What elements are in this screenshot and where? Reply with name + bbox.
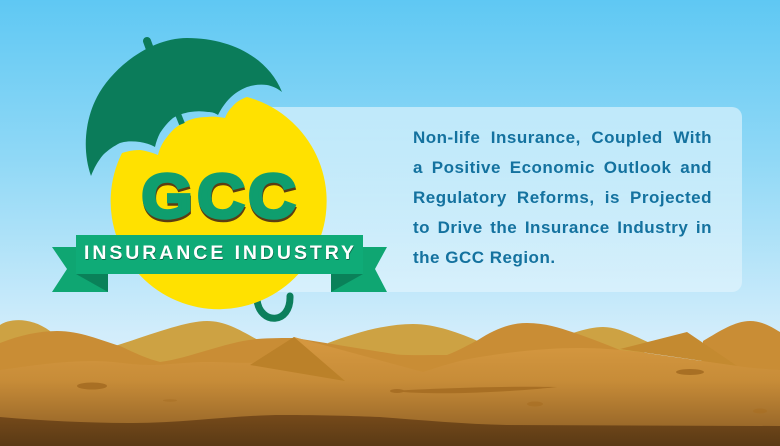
right ribbon tail bbox=[331, 247, 387, 292]
left ribbon fold bbox=[76, 274, 108, 292]
panel paragraph: the GCC Region. bbox=[413, 248, 556, 267]
ribbon subtitle: INSURANCE INDUSTRY bbox=[84, 242, 354, 264]
panel paragraph: Regulatory Reforms, is Projected bbox=[413, 188, 712, 207]
GCC letter shadow bbox=[142, 164, 296, 234]
panel paragraph: to Drive the Insurance Industry in bbox=[413, 218, 712, 237]
umbrella canopy bbox=[86, 38, 282, 176]
GCC heading bbox=[141, 161, 296, 234]
GCC letter faces: C bbox=[248, 161, 296, 231]
text panel bbox=[230, 107, 742, 292]
umbrella handle hook bbox=[257, 296, 290, 318]
right ribbon fold bbox=[331, 274, 363, 292]
GCC letter shadow: G bbox=[142, 164, 193, 234]
GCC letter faces bbox=[141, 161, 296, 231]
foreground dark sand bbox=[0, 415, 780, 446]
GCC letter shadow: C bbox=[198, 164, 245, 234]
back dunes bbox=[0, 320, 650, 365]
left pyramid bbox=[250, 337, 345, 381]
left ribbon tail bbox=[52, 247, 108, 292]
middle dunes bbox=[0, 321, 780, 380]
umbrella top nub bbox=[147, 41, 151, 52]
panel paragraph bbox=[413, 128, 712, 267]
ribbon subtitle: INSURANCE INDUSTRY bbox=[84, 243, 354, 265]
panel paragraph: Non-life Insurance, Coupled With bbox=[413, 128, 712, 147]
panel paragraph: a Positive Economic Outlook and bbox=[413, 158, 712, 177]
ribbon band bbox=[76, 235, 363, 274]
sand marks bbox=[77, 369, 767, 414]
yellow circle bbox=[111, 97, 327, 309]
front dune bbox=[0, 337, 780, 430]
GCC letter shadow: C bbox=[249, 164, 296, 234]
GCC letter faces: C bbox=[197, 161, 245, 231]
right pyramid bbox=[620, 332, 737, 366]
ribbon bbox=[52, 235, 387, 292]
GCC letter faces: G bbox=[141, 161, 193, 231]
umbrella stem bbox=[178, 114, 182, 124]
